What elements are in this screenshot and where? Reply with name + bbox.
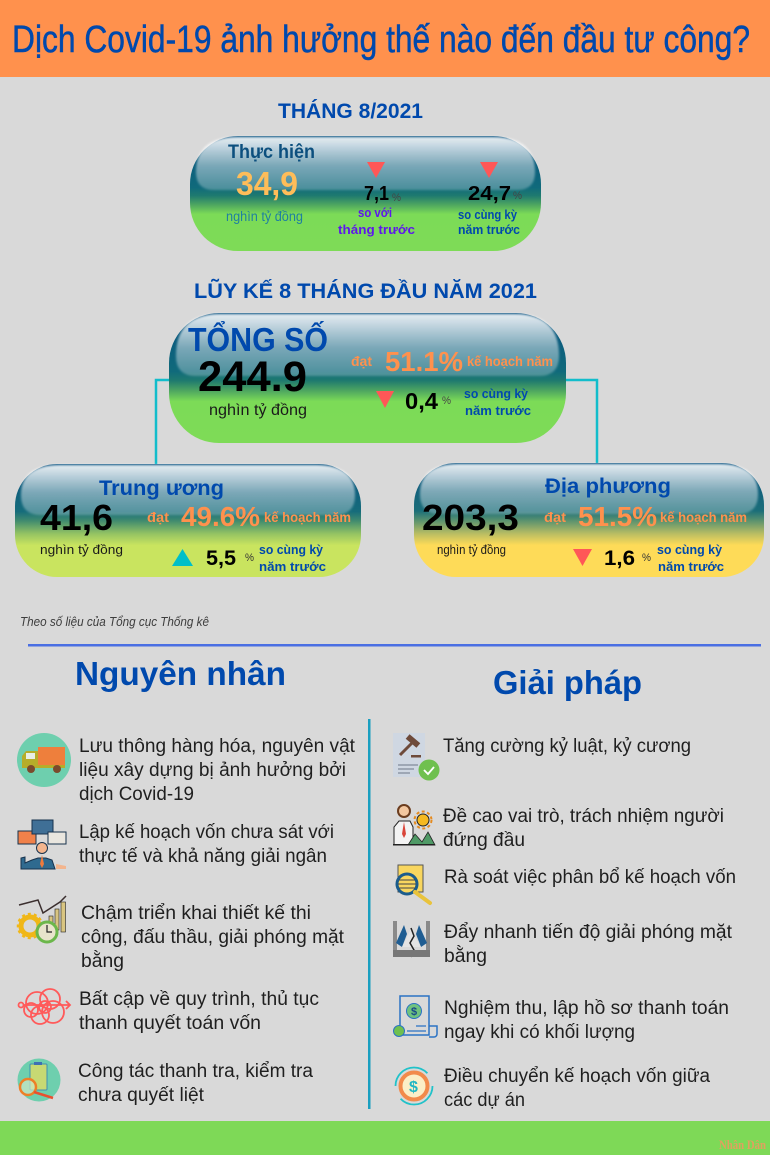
- text: cause 4: Bất cập về quy trình, thủ tục: [79, 989, 319, 1010]
- caption: versus same period: năm trước: [465, 403, 531, 418]
- caption: versus same period: so cùng kỳ: [464, 386, 529, 401]
- text: cause 3: [81, 903, 345, 972]
- panel: central government: [15, 464, 361, 577]
- text: cause 5: [78, 1061, 313, 1106]
- text: solution 3: Rà soát việc phân bổ kế hoạch vốn: [444, 867, 736, 888]
- unit: nghìn tỷ đồng: [40, 542, 123, 557]
- text: cause 4: [79, 989, 319, 1034]
- caption: versus same period: năm trước: [658, 559, 724, 574]
- panel: solutions list: [393, 733, 736, 1111]
- caption: versus same period: so cùng kỳ: [259, 542, 324, 557]
- value: 41,6: 41,6: [40, 497, 113, 538]
- icon: truck: [17, 733, 71, 787]
- plan completion: đạt: [351, 353, 372, 369]
- value: 0,4 percent: 0,4: [405, 388, 438, 414]
- heading: first 8 months cumulative: LŨY KẾ 8 THÁNG ĐẦU NĂM 2021: [194, 279, 537, 303]
- icon: gear, clock and chart: [18, 896, 66, 942]
- unit: nghìn tỷ đồng: [209, 402, 307, 419]
- text: solution 5: ngay khi có khối lượng: [444, 1022, 635, 1043]
- icon: down triangle: [376, 391, 394, 408]
- value: 0,4 percent: %: [442, 395, 451, 407]
- plan completion: kế hoạch năm: [467, 354, 553, 369]
- plan completion: [351, 346, 553, 377]
- icon: payment invoice: [394, 996, 437, 1037]
- value: 24,7 percent: 24,7: [468, 183, 511, 205]
- icon: coin with circular arrows: [396, 1068, 432, 1104]
- text: solution 6: các dự án: [444, 1090, 525, 1111]
- text: cause 4: thanh quyết toán vốn: [79, 1013, 261, 1034]
- text: cause 2: thực tế và khả năng giải ngân: [79, 846, 327, 867]
- panel: August figures: [190, 136, 541, 251]
- connector lines: [156, 380, 597, 465]
- icon: cracked house: [393, 921, 430, 957]
- text: cause 2: Lập kế hoạch vốn chưa sát với: [79, 822, 334, 843]
- caption: versus same period: so cùng kỳ: [458, 208, 517, 222]
- text: solution 4: bằng: [444, 945, 487, 967]
- caption: versus previous month: [338, 206, 415, 237]
- plan completion: đạt: [147, 509, 169, 525]
- footer band: [0, 1121, 770, 1155]
- plan completion: 51.1%: [385, 346, 463, 377]
- value: 1,6 percent: [604, 547, 651, 570]
- text: solution 6: [444, 1066, 710, 1111]
- value: 7,1 percent: 7,1: [364, 183, 389, 205]
- value: 5,5 percent: [206, 547, 254, 570]
- caption: versus same period: [657, 542, 724, 574]
- text: cause 1: Lưu thông hàng hóa, nguyên vật: [79, 736, 356, 757]
- icon: down triangle: [480, 162, 498, 178]
- caption: versus same period: so cùng kỳ: [657, 542, 723, 557]
- text: solution 5: [444, 998, 729, 1043]
- panel: causes list: [17, 733, 356, 1106]
- value: 5,5 percent: %: [245, 552, 254, 564]
- text: solution 2: [443, 806, 724, 851]
- value: 7,1 percent: %: [392, 192, 401, 204]
- plan completion: đạt: [544, 509, 566, 525]
- panel: local government: [414, 463, 764, 577]
- icon: coin with circular arrows: $: [409, 1079, 418, 1096]
- source note: Theo số liệu của Tổng cục Thống kê: [20, 614, 209, 629]
- caption: versus previous month: tháng trước: [338, 223, 415, 237]
- value: 1,6 percent: 1,6: [604, 547, 635, 570]
- value: 0,4 percent: [405, 388, 451, 414]
- icon: up triangle: [172, 549, 193, 566]
- value: 34,9: 34,9: [236, 165, 298, 202]
- icon: down triangle: [573, 549, 592, 566]
- text: cause 3: Chậm triển khai thiết kế thi: [81, 903, 311, 924]
- text: cause 1: [79, 736, 356, 805]
- plan completion: kế hoạch năm: [660, 510, 747, 525]
- heading: causes: Nguyên nhân: [75, 655, 286, 692]
- value: 244.9: 244.9: [198, 353, 307, 401]
- plan completion: [147, 501, 351, 532]
- plan completion: 49.6%: [181, 501, 260, 532]
- value: 203,3: 203,3: [422, 497, 519, 538]
- label: local: Địa phương: [545, 475, 671, 498]
- plan completion: kế hoạch năm: [264, 510, 351, 525]
- text: solution 4: Đẩy nhanh tiến độ giải phóng mặt: [444, 922, 733, 943]
- text: cause 3: công, đấu thầu, giải phóng mặt: [81, 927, 345, 948]
- caption: versus same period: năm trước: [259, 559, 326, 574]
- icon: tangled line: [18, 989, 70, 1024]
- text: cause 1: liệu xây dựng bị ảnh hưởng bởi: [79, 760, 346, 781]
- unit: nghìn tỷ đồng: [437, 542, 506, 557]
- icon: clipboard and magnifier: [18, 1058, 60, 1102]
- icon: presenter with speech bubbles: [18, 820, 66, 869]
- icon: payment invoice: $: [411, 1006, 417, 1018]
- icon: document under magnifier: [397, 865, 430, 903]
- caption: versus same period: năm trước: [458, 223, 520, 237]
- value: 5,5 percent: 5,5: [206, 547, 236, 570]
- value: 1,6 percent: %: [642, 552, 651, 564]
- unit: nghìn tỷ đồng: [226, 209, 303, 224]
- heading: August 2021: THÁNG 8/2021: [278, 100, 423, 123]
- text: solution 5: Nghiệm thu, lập hồ sơ thanh toán: [444, 998, 729, 1019]
- label: implemented: Thực hiện: [228, 142, 315, 163]
- text: cause 5: chưa quyết liệt: [78, 1085, 205, 1106]
- label: central: Trung ương: [99, 477, 224, 500]
- text: solution 6: Điều chuyển kế hoạch vốn giữa: [444, 1066, 710, 1087]
- text: solution 2: Đề cao vai trò, trách nhiệm người: [443, 806, 724, 827]
- icon: leader with gear: [393, 805, 435, 846]
- header band: [0, 0, 770, 77]
- caption: versus same period: [259, 542, 326, 574]
- caption: versus same period: [458, 208, 520, 237]
- text: cause 3: bằng: [81, 950, 124, 972]
- text: cause 2: [79, 822, 334, 867]
- panel: total: [169, 313, 566, 443]
- caption: versus same period: [464, 386, 531, 418]
- label: total: TỔNG SỐ: [188, 320, 328, 358]
- plan completion: 51.5%: [578, 501, 657, 532]
- heading: solutions: Giải pháp: [493, 664, 642, 701]
- text: solution 2: đứng đầu: [443, 830, 525, 851]
- icon: gavel and document: [393, 733, 440, 780]
- caption: versus previous month: so với: [358, 206, 392, 220]
- text: cause 5: Công tác thanh tra, kiểm tra: [78, 1061, 313, 1082]
- text: cause 1: dịch Covid-19: [79, 784, 194, 805]
- plan completion: [544, 501, 747, 532]
- icon: down triangle: [367, 162, 385, 178]
- text: solution 4: [444, 922, 733, 967]
- value: 24,7 percent: %: [513, 190, 522, 202]
- text: solution 1: Tăng cường kỷ luật, kỷ cương: [443, 736, 691, 757]
